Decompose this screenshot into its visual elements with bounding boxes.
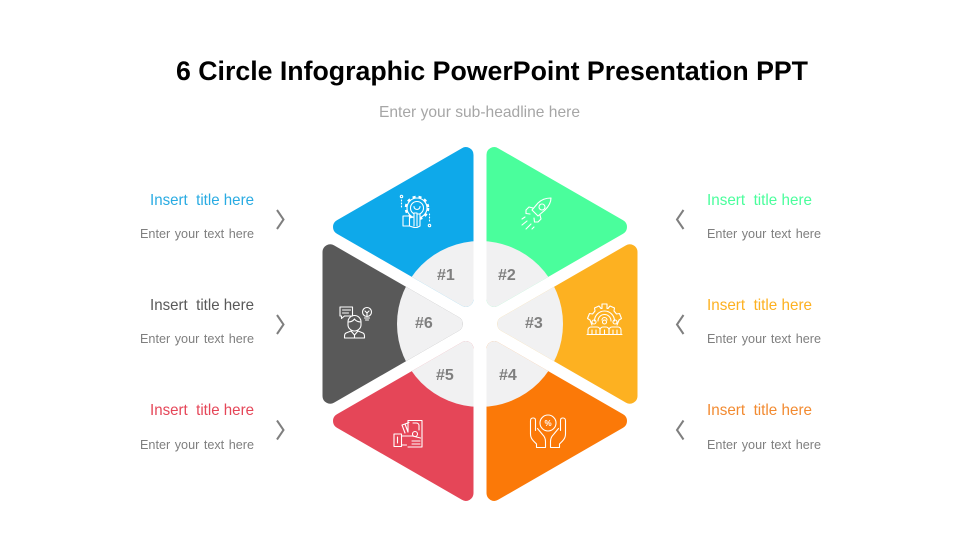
item title: Insert title here [150, 402, 254, 419]
item text: Enter your text here [140, 438, 254, 452]
arrow [277, 420, 284, 440]
item title: Insert title here [707, 297, 812, 314]
segment 5: red [333, 341, 474, 501]
number 4: #4 [499, 367, 517, 384]
item text: Enter your text here [707, 332, 821, 346]
arrow [677, 315, 684, 334]
segment 1: blue [333, 147, 474, 307]
subtitle: Enter your sub-headline here [379, 104, 580, 121]
right item 1 [677, 192, 821, 241]
number 6: #6 [415, 315, 433, 332]
number 2: #2 [498, 267, 516, 284]
left item 2 [140, 297, 284, 346]
arrow [277, 210, 284, 229]
segment 6: dark gray [322, 244, 463, 404]
icon: hand with money [394, 420, 422, 447]
icon: gear with hand [400, 195, 431, 228]
arrow [677, 210, 684, 229]
icon: gear with people [587, 304, 622, 334]
icon: person with speech bubble and bulb [340, 307, 372, 338]
number 5: #5 [436, 367, 454, 384]
item title: Insert title here [150, 192, 254, 209]
icon: hands holding percent: % [544, 419, 552, 428]
item text: Enter your text here [707, 438, 821, 452]
right item 3 [677, 402, 821, 452]
item text: Enter your text here [140, 227, 254, 241]
item title: Insert title here [150, 297, 254, 314]
icon: hands holding percent [530, 415, 566, 448]
item title: Insert title here [707, 402, 812, 419]
number 1: #1 [437, 267, 455, 284]
segment 4: orange [486, 341, 627, 501]
left item 1 [140, 192, 284, 241]
right item 2 [677, 297, 821, 346]
number 3: #3 [525, 315, 543, 332]
arrow [277, 315, 284, 334]
hexagon diagram [322, 147, 638, 501]
segment 2: green [486, 147, 627, 307]
icon: rocket [522, 198, 551, 229]
title: 6 Circle Infographic PowerPoint Presentation PPT [176, 56, 808, 86]
arrow [677, 420, 684, 440]
item text: Enter your text here [707, 227, 821, 241]
item text: Enter your text here [140, 332, 254, 346]
center circle [397, 241, 563, 407]
left item 3 [140, 402, 284, 452]
item title: Insert title here [707, 192, 812, 209]
segment 3: amber [497, 244, 638, 404]
